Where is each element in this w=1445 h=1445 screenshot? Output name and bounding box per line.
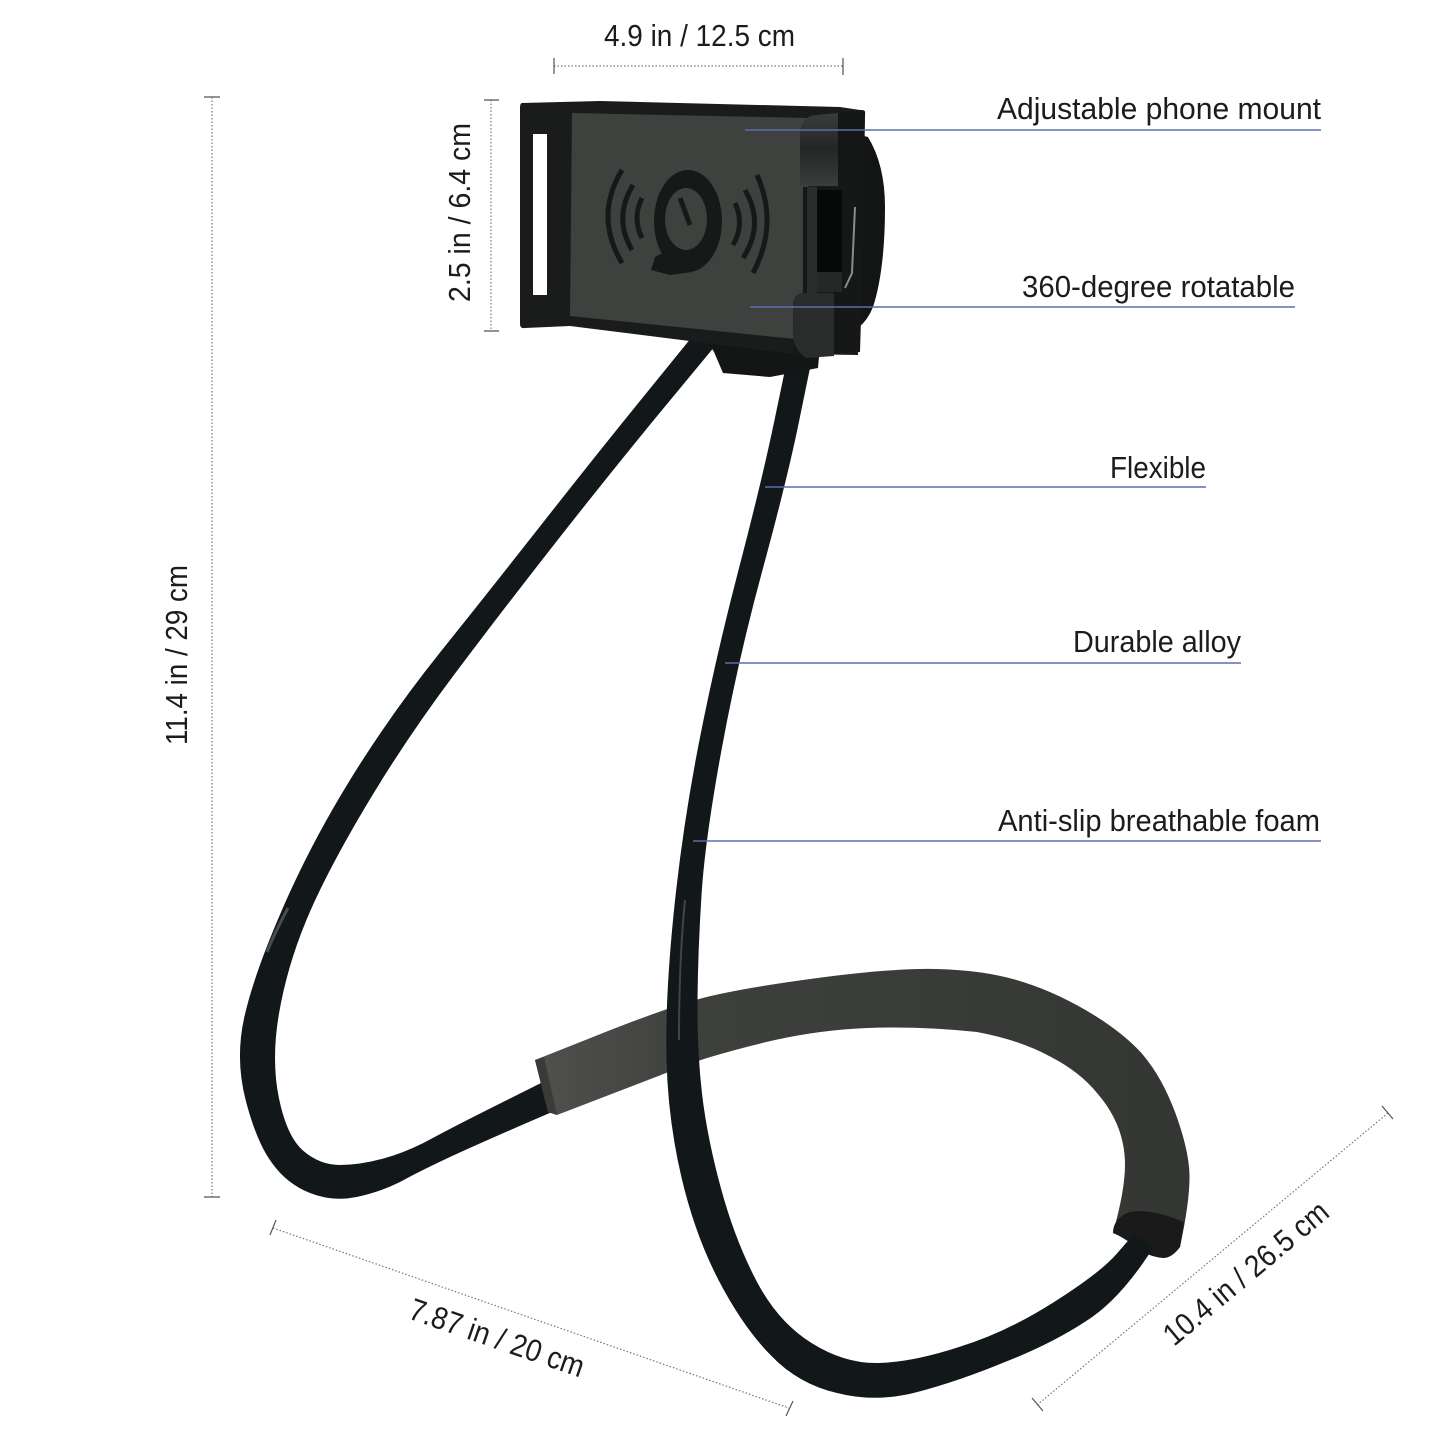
mount bracket	[708, 342, 820, 377]
left arm highlight	[267, 908, 288, 952]
label: flexible: Flexible	[1110, 450, 1206, 485]
label: durable alloy: Durable alloy	[1073, 624, 1241, 659]
dimension: total height: 11.4 in / 29 cm	[159, 565, 194, 745]
dimension: arm span: 7.87 in / 20 cm	[405, 1292, 589, 1384]
dimension: mount height	[442, 100, 499, 331]
dimension: neck loop	[1032, 1106, 1393, 1411]
clamp side strip	[807, 187, 817, 293]
logo sound waves	[608, 170, 767, 273]
dimension: total height	[159, 97, 220, 1197]
dimension: mount width: 4.9 in / 12.5 cm	[604, 18, 795, 53]
phone mount body	[520, 101, 865, 355]
arm highlight	[679, 900, 685, 1040]
logo clock bubble	[651, 170, 722, 275]
back rotating disc	[858, 135, 885, 328]
dimension: neck loop: 10.4 in / 26.5 cm	[1156, 1194, 1336, 1352]
right clamp assembly	[793, 110, 865, 358]
label: 360-degree rotatable: 360-degree rotatable	[1022, 269, 1295, 304]
lower clamp front	[793, 293, 834, 358]
dimension: arm span	[270, 1220, 793, 1416]
upper clamp head	[838, 110, 865, 187]
foam right collar	[1113, 1211, 1184, 1258]
mount back plate	[570, 113, 810, 340]
label: adjustable phone mount: Adjustable phone mount	[997, 91, 1321, 126]
leader lines	[693, 130, 1321, 841]
clamp window	[817, 190, 842, 272]
foam left end cap	[535, 1057, 557, 1115]
mount slot	[533, 134, 547, 295]
clamp lower window	[817, 272, 842, 292]
left flexible arm	[240, 327, 720, 1199]
long flexible arm	[666, 365, 1153, 1398]
foam neck pad	[535, 969, 1190, 1247]
dimension: mount width	[554, 18, 843, 75]
clamp edge highlight	[845, 207, 855, 288]
dimension: mount height: 2.5 in / 6.4 cm	[442, 123, 477, 302]
product: neck phone holder	[240, 101, 1190, 1398]
upper clamp front	[800, 113, 838, 186]
label: anti-slip breathable foam: Anti-slip breathable foam	[998, 803, 1320, 838]
clamp rail	[793, 187, 865, 355]
